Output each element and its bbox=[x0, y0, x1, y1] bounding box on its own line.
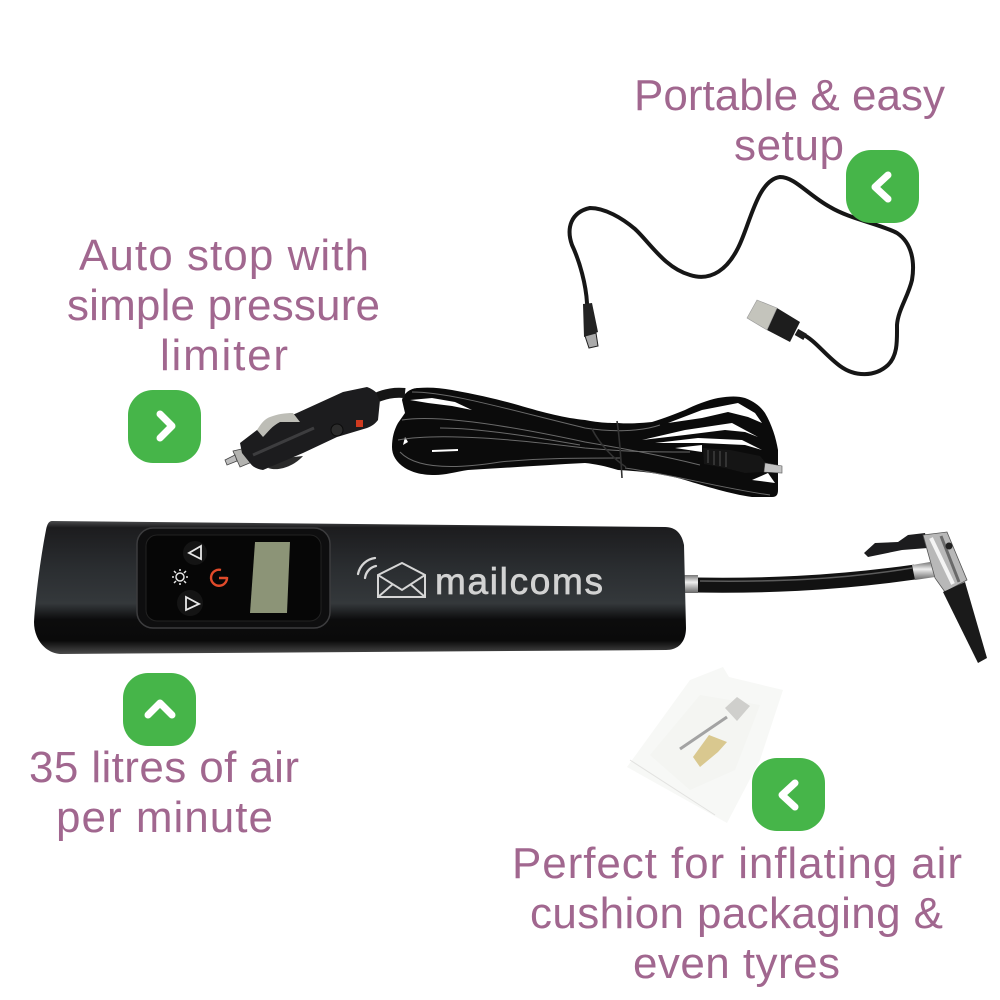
cable tie bbox=[592, 421, 626, 478]
icon: green badge, airflow bbox=[123, 673, 196, 746]
heading: perfect for inflating: Perfect for inflating air bbox=[512, 839, 962, 888]
valve connector head bbox=[864, 532, 967, 592]
button: light bbox=[172, 569, 188, 585]
icon: green badge, portable setup bbox=[846, 150, 919, 223]
button: right arrow bbox=[177, 590, 203, 616]
heading: airflow: 35 litres of air bbox=[29, 743, 299, 792]
DC barrel jack bbox=[703, 448, 782, 473]
USB charging cable bbox=[570, 177, 913, 374]
lighter plug bbox=[225, 387, 405, 470]
mailcoms logo bbox=[358, 558, 603, 602]
heading: portable and easy setup: setup bbox=[734, 121, 844, 170]
heading: auto stop: simple pressure bbox=[67, 281, 380, 330]
heading: portable and easy setup bbox=[634, 71, 945, 170]
heading: perfect for inflating: cushion packaging & bbox=[530, 889, 943, 938]
brass adapter bbox=[693, 735, 727, 767]
button: left arrow bbox=[183, 541, 207, 565]
heading: auto stop: limiter bbox=[160, 331, 288, 380]
air pump device bbox=[34, 521, 987, 663]
heading: auto stop bbox=[67, 231, 380, 380]
heading: airflow: per minute bbox=[56, 793, 273, 842]
button: power bbox=[211, 570, 227, 586]
micro USB plug bbox=[583, 303, 598, 348]
icon: green badge, auto stop bbox=[128, 390, 201, 463]
needle adapter bbox=[680, 697, 750, 749]
nozzle bbox=[943, 582, 987, 663]
heading: airflow bbox=[29, 743, 299, 842]
control panel bbox=[137, 528, 330, 628]
coiled flat cable bbox=[392, 388, 778, 497]
hose bbox=[684, 562, 935, 593]
strand highlights bbox=[398, 392, 770, 495]
heading: perfect for inflating bbox=[512, 839, 962, 988]
icon: green badge, uses bbox=[752, 758, 825, 831]
car charger cable bbox=[225, 387, 782, 497]
mailcoms logo: mailcoms bbox=[435, 561, 603, 602]
adapter bag bbox=[627, 667, 783, 823]
USB-A plug bbox=[747, 300, 807, 342]
heading: perfect for inflating: even tyres bbox=[633, 939, 840, 988]
heading: auto stop: Auto stop with bbox=[79, 231, 369, 280]
LCD screen bbox=[250, 542, 290, 613]
heading: portable and easy setup: Portable & easy bbox=[634, 71, 945, 120]
gaps between strands bbox=[403, 398, 775, 483]
body bbox=[34, 521, 686, 654]
